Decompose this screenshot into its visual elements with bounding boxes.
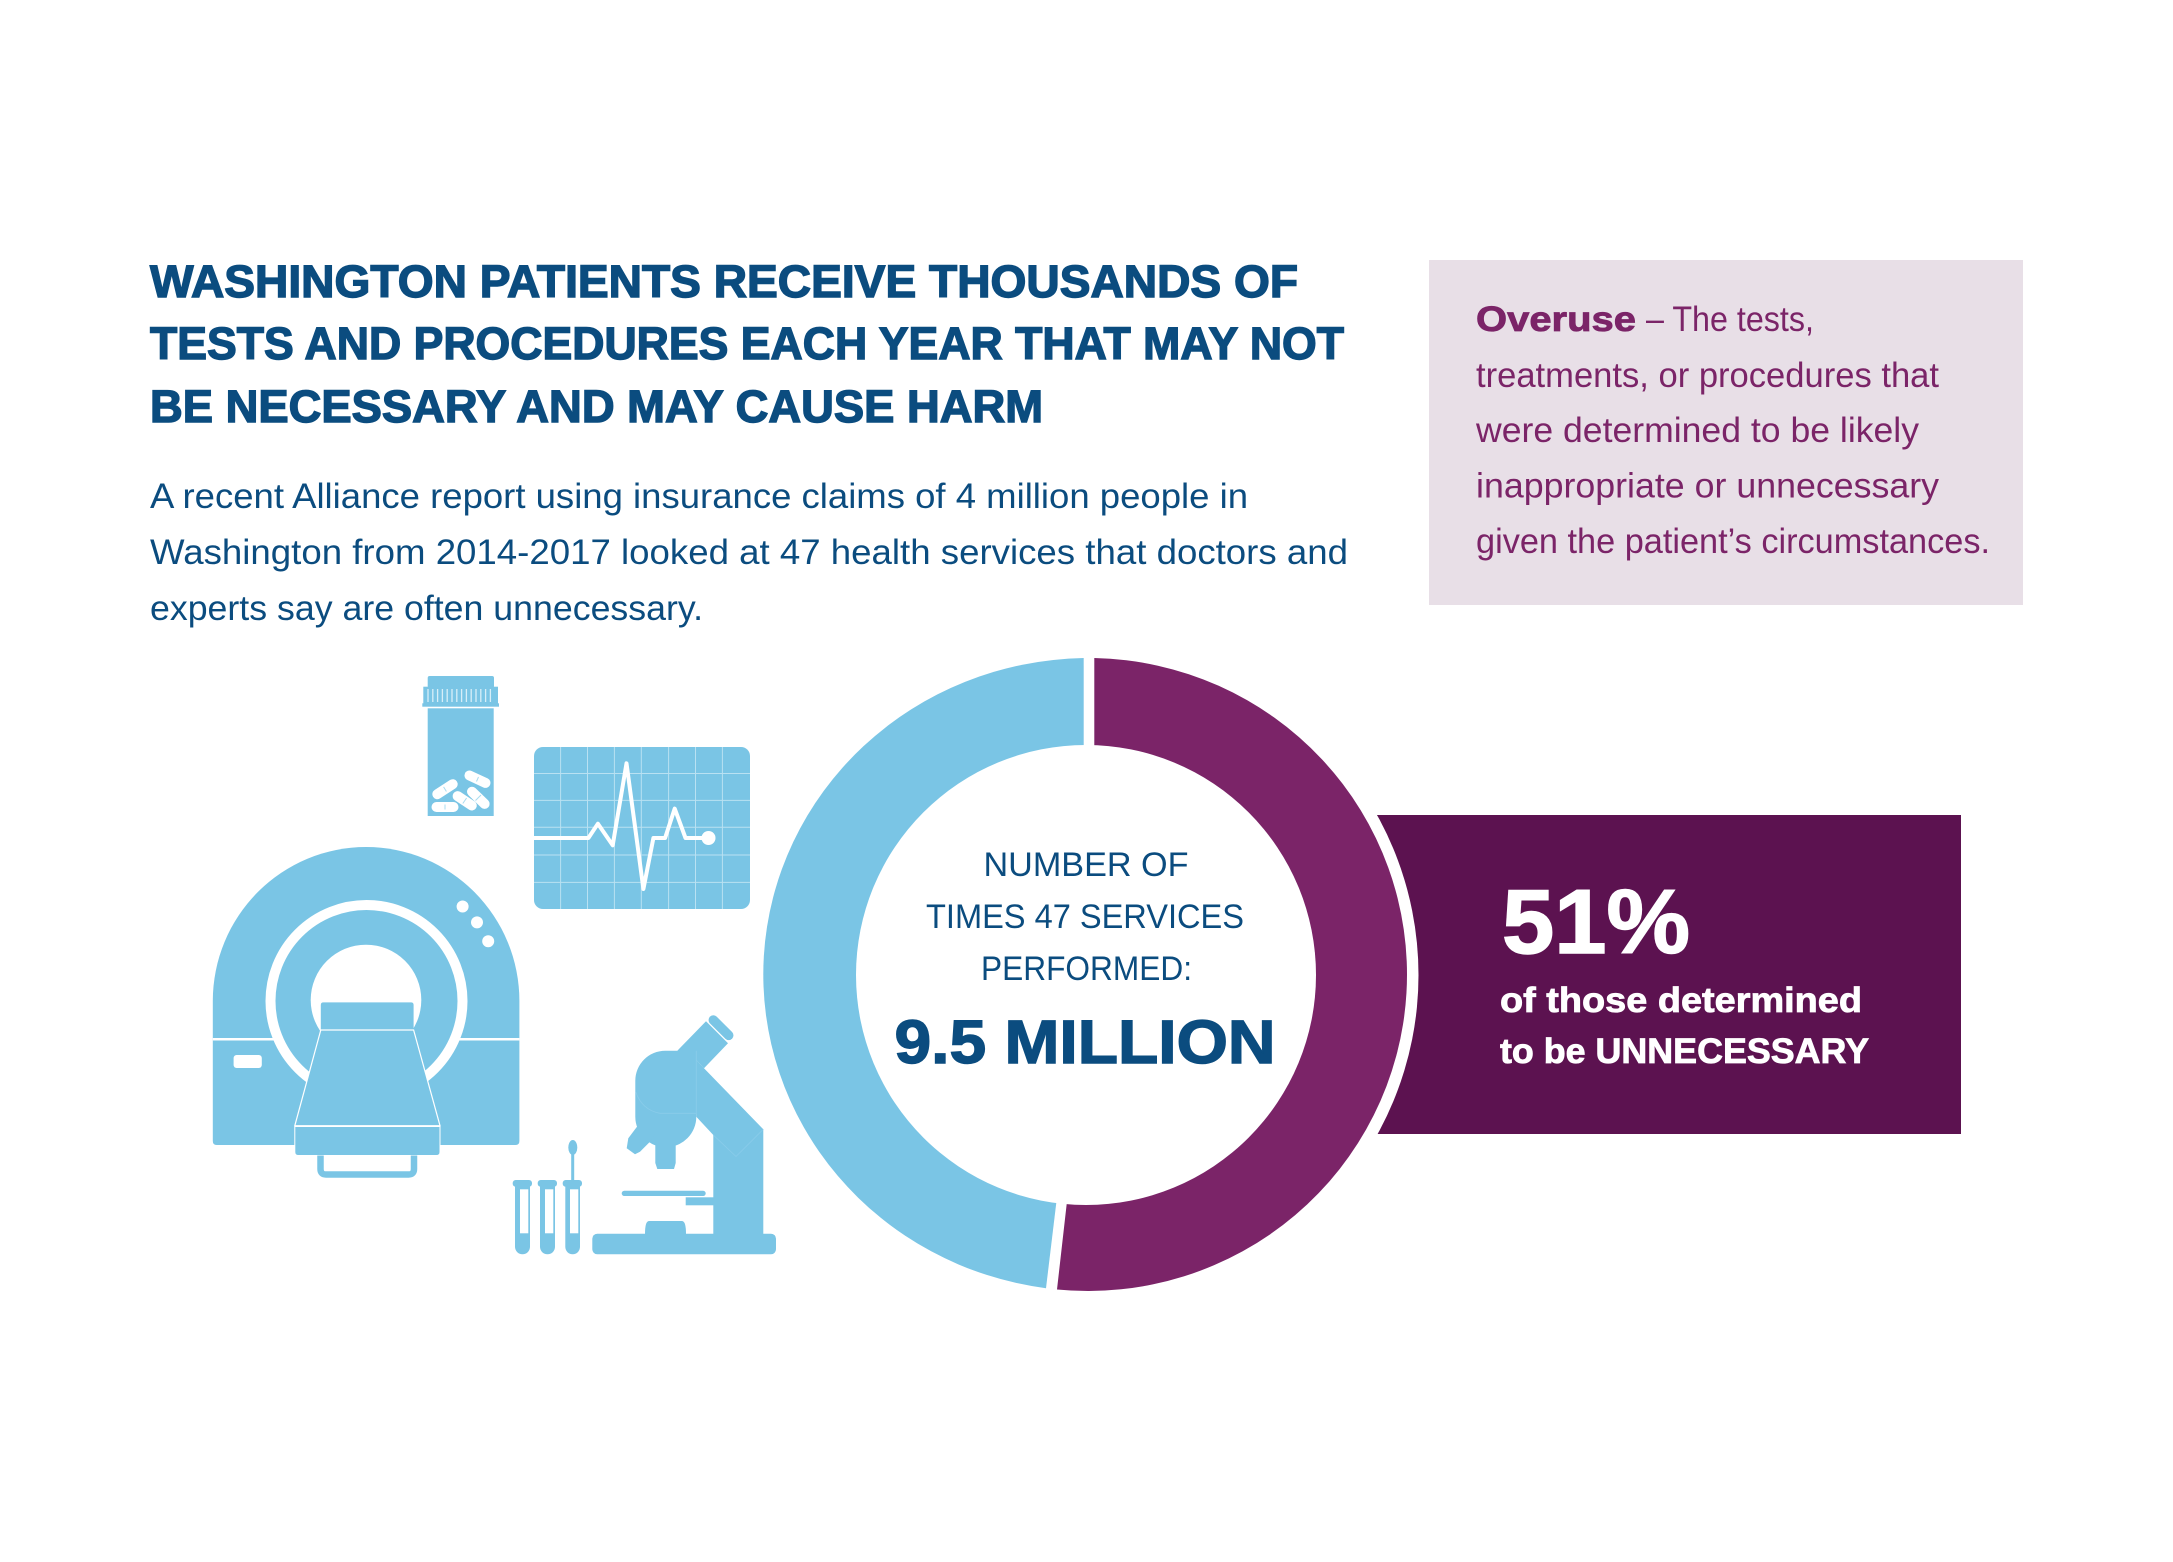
icon: test tubes bbox=[513, 1140, 582, 1254]
intro text block: A recent Alliance report using insurance claims of 4 million people in bbox=[150, 477, 1248, 516]
donut centre label: 9.5 MILLION bbox=[894, 1008, 1276, 1076]
stat: 51% of those determined to be unnecessary: of those determined bbox=[1500, 981, 1862, 1020]
icon: pill bottle bbox=[422, 676, 499, 816]
title bbox=[150, 256, 1344, 432]
stat: 51% of those determined to be unnecessary: 51% bbox=[1502, 872, 1690, 973]
panel: overuse definition: treatments, or procedures that bbox=[1476, 356, 1939, 395]
title: WASHINGTON PATIENTS RECEIVE THOUSANDS OF bbox=[150, 256, 1298, 307]
intro text block bbox=[150, 477, 1348, 628]
donut centre label: TIMES 47 SERVICES bbox=[926, 898, 1244, 936]
panel: overuse definition: – The tests, bbox=[1646, 300, 1814, 339]
title: TESTS AND PROCEDURES EACH YEAR THAT MAY NOT bbox=[150, 318, 1344, 369]
icon: microscope bbox=[592, 1020, 776, 1254]
stat: 51% of those determined to be unnecessary: to be UNNECESSARY bbox=[1500, 1032, 1869, 1071]
title: BE NECESSARY AND MAY CAUSE HARM bbox=[150, 381, 1043, 432]
panel: overuse definition: inappropriate or unnecessary bbox=[1476, 466, 1940, 506]
panel: overuse definition: were determined to be likely bbox=[1475, 411, 1920, 450]
stat: 51% of those determined to be unnecessary bbox=[1500, 872, 1869, 1071]
donut centre label: PERFORMED: bbox=[981, 950, 1192, 988]
panel: overuse definition: Overuse bbox=[1476, 300, 1636, 339]
icon: MRI scanner bbox=[213, 847, 519, 1174]
panel: overuse definition: given the patient’s circumstances. bbox=[1476, 522, 1990, 561]
donut segment: unnecessary (purple) bbox=[1057, 658, 1407, 1291]
donut centre label bbox=[894, 846, 1276, 1076]
chart: donut 51 percent unnecessary bbox=[760, 646, 1961, 1304]
stat box: dark purple bbox=[1377, 815, 1961, 1134]
donut segment: remainder (light blue) bbox=[763, 658, 1084, 1288]
donut centre label: NUMBER OF bbox=[984, 846, 1188, 884]
intro text block: experts say are often unnecessary. bbox=[150, 589, 703, 628]
icon: heart monitor bbox=[534, 747, 750, 909]
intro text block: Washington from 2014-2017 looked at 47 health services that doctors and bbox=[150, 533, 1348, 572]
panel: overuse definition bbox=[1429, 260, 2023, 605]
